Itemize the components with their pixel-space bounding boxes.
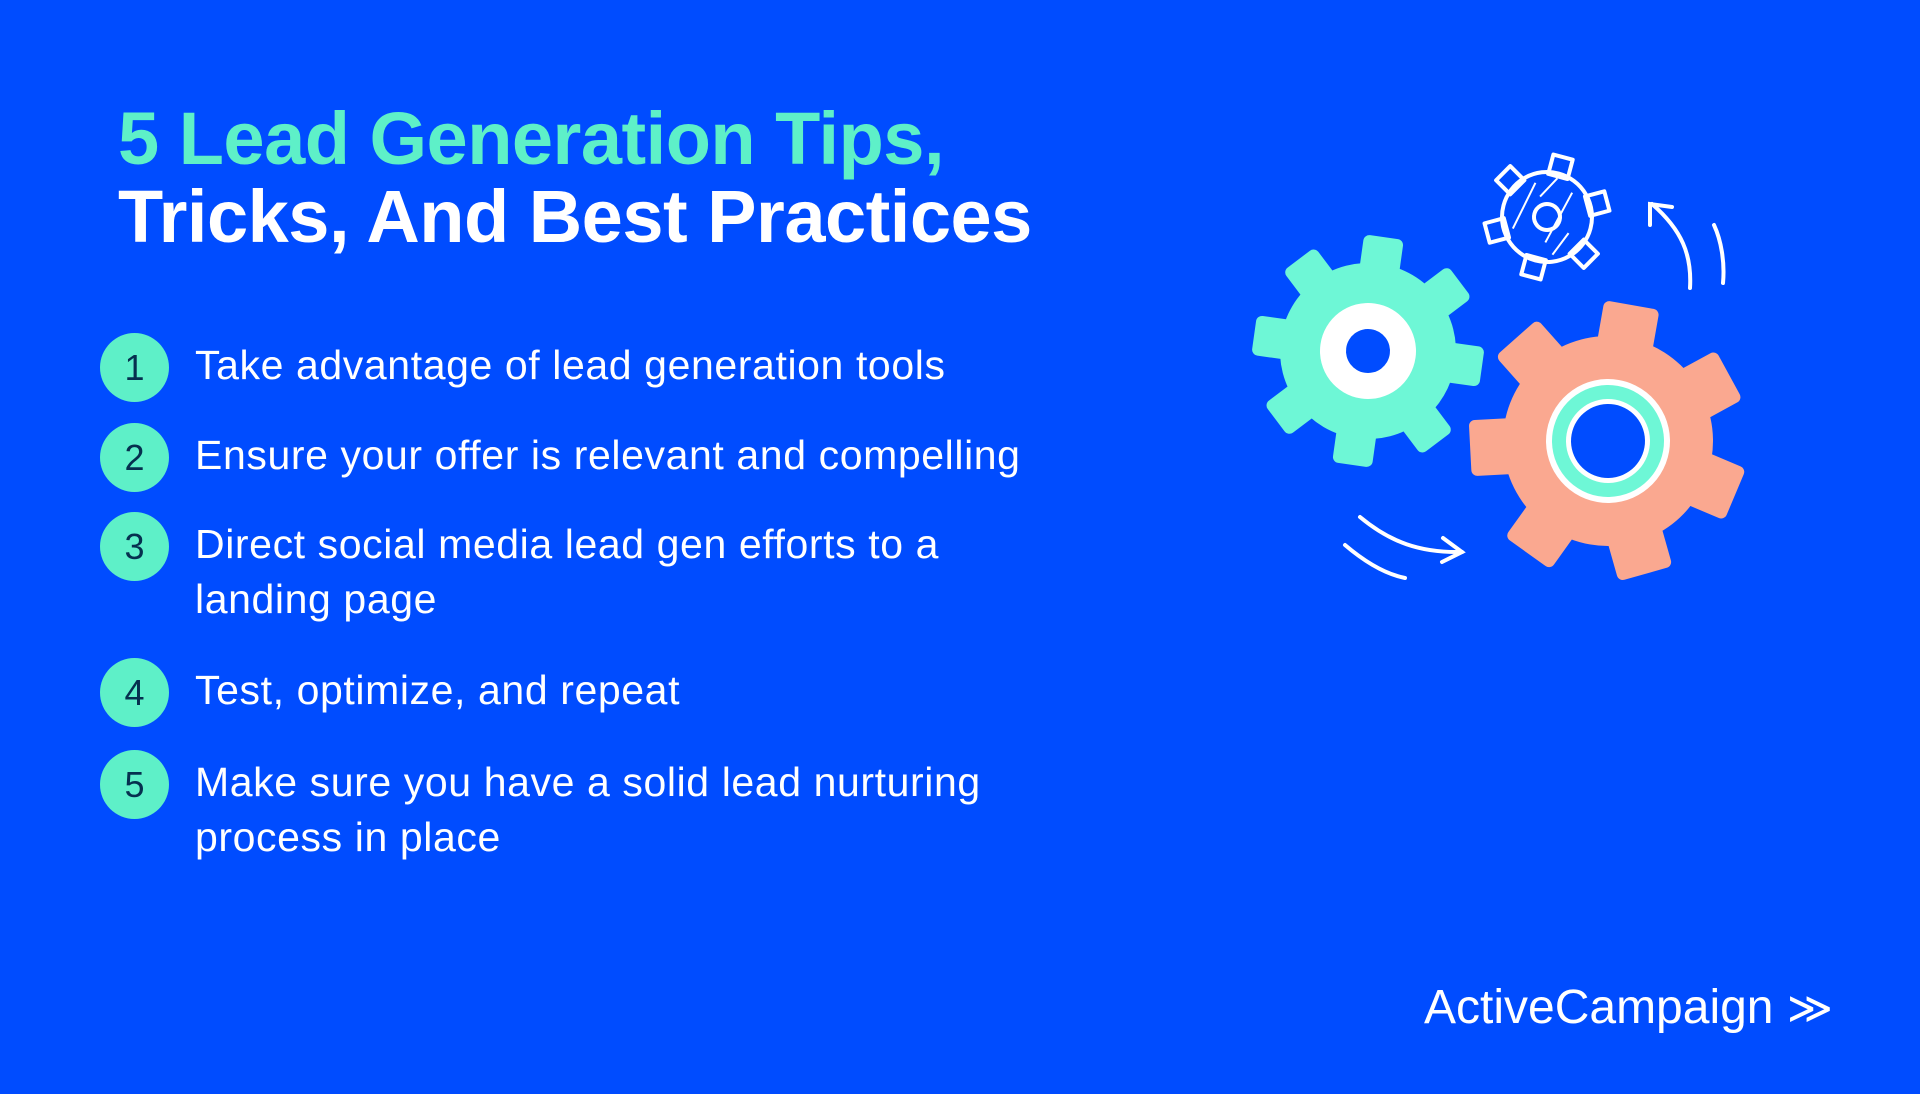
green gear [1238,221,1498,481]
tip 3: landing page [195,576,437,622]
arrow: bottom left [1345,517,1462,578]
tip 1: Take advantage of lead generation tools [195,342,946,388]
tip 4: 4 [124,672,145,713]
tip 3 [100,512,939,622]
orange gear [1446,281,1771,600]
tip 5 [100,750,981,860]
tip 5: 5 [124,764,145,805]
arrow: top right [1650,204,1724,288]
tip 2 [100,423,1021,492]
outline gear [1474,142,1620,292]
tip 3: 3 [124,526,145,567]
tip 5: Make sure you have a solid lead nurturing [195,759,981,805]
tip 4 [100,658,680,727]
tip 2: 2 [124,437,145,478]
title: Tricks, And Best Practices [118,175,1032,258]
tip 1: 1 [124,347,145,388]
tip 2: Ensure your offer is relevant and compelling [195,432,1021,478]
tip 3: Direct social media lead gen efforts to a [195,521,939,567]
tip 4: Test, optimize, and repeat [195,667,680,713]
title [118,97,1032,258]
tip 1 [100,333,946,402]
logo: ActiveCampaign ≫ [1424,981,1833,1034]
tip 5: process in place [195,814,501,860]
title: 5 Lead Generation Tips, [118,97,944,180]
